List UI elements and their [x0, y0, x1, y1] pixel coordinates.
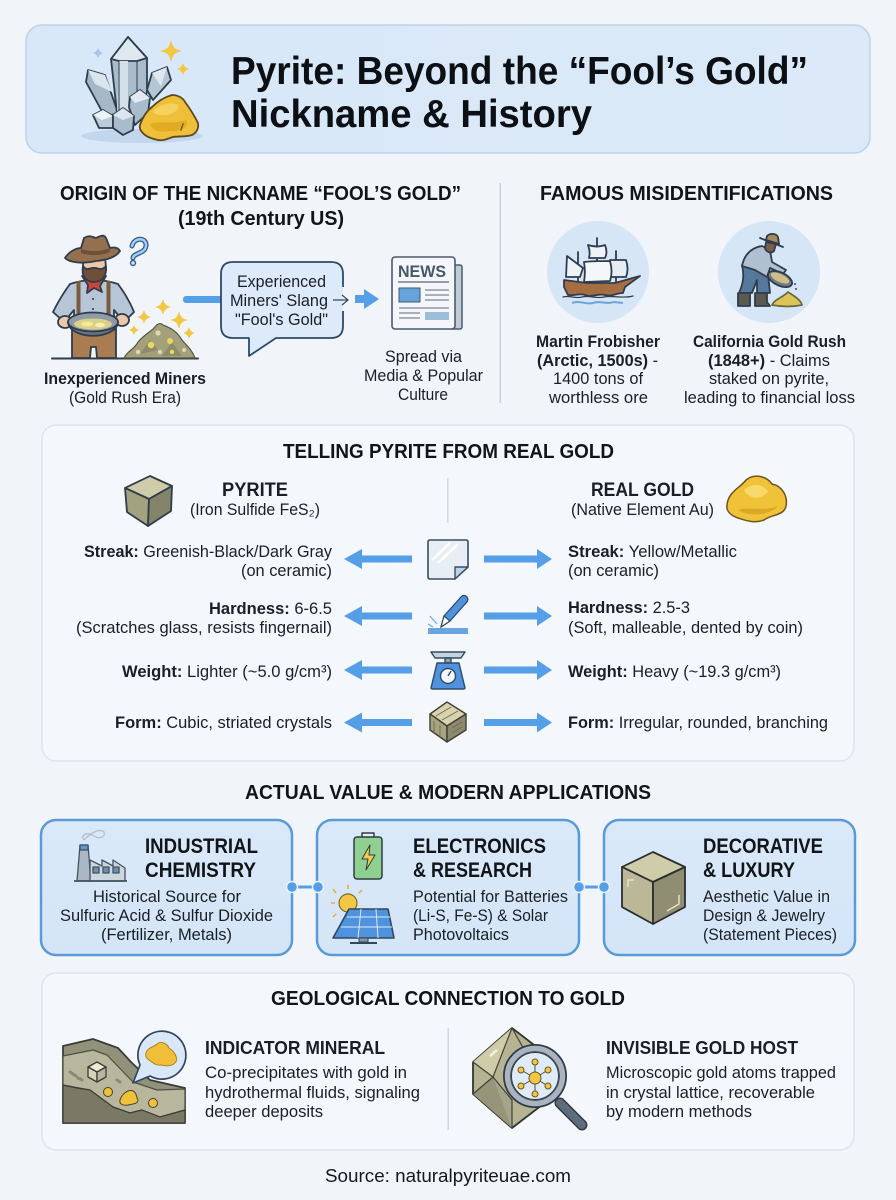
icon: gold nugget — [727, 476, 786, 522]
arrow: right — [484, 660, 552, 680]
text: indicator mineral: Co-precipitates with gold in — [205, 1064, 407, 1082]
row: hardness: Hardness: 6-6.5 — [209, 600, 332, 618]
row: streak — [84, 540, 737, 580]
label: spread via media: Media & Popular — [364, 367, 483, 385]
title: decorative and luxury — [703, 835, 823, 882]
text: invisible gold host — [606, 1038, 836, 1121]
connector: electronics to decorative — [574, 882, 610, 892]
icon: pyrite cube — [125, 476, 172, 526]
icon: battery — [354, 833, 382, 879]
label: inexperienced miners — [44, 370, 206, 407]
source line: Source: naturalpyriteuae.com — [325, 1166, 571, 1186]
text: california gold rush: (1848+) - Claims — [708, 352, 830, 370]
label: spread via media — [364, 348, 483, 404]
text: indicator mineral — [205, 1038, 420, 1121]
icon: pile of pyrite with sparkles — [124, 300, 195, 358]
icon: solar panel and sun — [331, 885, 394, 944]
connector: industrial to electronics — [286, 882, 324, 892]
text: decorative description: Aesthetic Value in — [703, 888, 830, 906]
icon: decorative cube — [622, 852, 685, 924]
heading: comparison: TELLING PYRITE FROM REAL GOLD — [283, 441, 614, 463]
real gold heading — [571, 480, 714, 519]
text: decorative description: (Statement Pieces) — [703, 926, 837, 944]
icon: miner with pan — [52, 236, 198, 358]
text: martin frobisher: 1400 tons of — [553, 370, 643, 388]
icon: factory — [74, 830, 127, 881]
row: form: Form: Irregular, rounded, branching — [568, 714, 828, 732]
header banner — [26, 25, 870, 153]
text: electronics description: Photovoltaics — [413, 926, 509, 944]
row: weight: Weight: Heavy (~19.3 g/cm³) — [568, 663, 781, 681]
row: streak: Streak: Greenish-Black/Dark Gray — [84, 543, 333, 561]
panel: geological connection to gold — [42, 973, 854, 1150]
card: electronics and research — [317, 820, 579, 955]
text: electronics description: (Li-S, Fe-S) & Solar — [413, 907, 548, 925]
row: hardness: Hardness: 2.5-3 — [568, 599, 690, 617]
speech bubble: slang: Miners' Slang — [230, 292, 328, 310]
text: invisible gold host: Microscopic gold atoms trapped — [606, 1064, 836, 1082]
heading: actual value and modern applications: ACTUAL VALUE & MODERN APPLICATIONS — [245, 782, 651, 804]
pyrite heading: (Iron Sulfide FeS₂) — [190, 501, 320, 519]
text: decorative description — [703, 888, 837, 944]
title: industrial chemistry: INDUSTRIAL — [145, 835, 258, 858]
text: martin frobisher: Martin Frobisher — [536, 333, 661, 351]
row: weight — [122, 652, 781, 689]
arrow: left — [344, 549, 412, 569]
title: Nickname & History — [231, 93, 593, 136]
text: indicator mineral: INDICATOR MINERAL — [205, 1038, 385, 1058]
text: decorative description: Design & Jewelry — [703, 907, 826, 925]
card: decorative and luxury — [604, 820, 855, 955]
icon: pyrite crystal with magnifier — [473, 1028, 582, 1128]
pyrite heading: PYRITE — [222, 480, 288, 501]
row: streak: (on ceramic) — [241, 562, 332, 580]
pyrite heading — [190, 480, 320, 519]
heading: origin — [60, 183, 461, 230]
icon: pyrite crystals and gold nugget — [81, 37, 203, 143]
panel: famous misidentifications — [536, 183, 855, 407]
text: california gold rush: California Gold Rush — [693, 333, 846, 351]
icon: striated cube — [430, 702, 466, 742]
label: inexperienced miners: (Gold Rush Era) — [69, 389, 181, 407]
text: martin frobisher: worthless ore — [548, 389, 648, 407]
label: inexperienced miners: Inexperienced Miners — [44, 370, 206, 388]
title: electronics and research: & RESEARCH — [413, 859, 532, 882]
title: industrial chemistry: CHEMISTRY — [145, 859, 256, 882]
text: industrial description: (Fertilizer, Metals) — [101, 926, 232, 944]
arrow: right — [484, 549, 552, 569]
text: electronics description: Potential for Batteries — [413, 888, 568, 906]
text: industrial description: Historical Source for — [93, 888, 241, 906]
arrow: to newspaper — [355, 289, 379, 309]
panel: telling pyrite from real gold — [42, 425, 854, 761]
text: invisible gold host: in crystal lattice, recoverable — [606, 1084, 815, 1102]
real gold heading: (Native Element Au) — [571, 501, 714, 519]
icon: question mark — [130, 239, 146, 266]
label: spread via media: Culture — [398, 386, 448, 404]
text: martin frobisher — [536, 333, 661, 407]
icon: ceramic streak plate — [428, 540, 468, 579]
icon: newspaper: NEWS — [398, 262, 446, 281]
icon: rock strata with callout — [63, 1031, 186, 1123]
row: streak: Streak: Yellow/Metallic — [568, 543, 737, 561]
heading: origin: ORIGIN OF THE NICKNAME “FOOL’S GOLD” — [60, 183, 461, 205]
panel: origin of the nickname — [44, 183, 483, 407]
row: form — [115, 702, 828, 742]
arrow: left — [344, 660, 412, 680]
label: spread via media: Spread via — [385, 348, 463, 366]
title: decorative and luxury: & LUXURY — [703, 859, 795, 882]
speech bubble: slang: "Fool's Gold" — [235, 311, 328, 329]
title: Pyrite: Beyond the “Fool’s Gold” — [231, 50, 808, 93]
text: industrial description: Sulfuric Acid & Sulfur Dioxide — [60, 907, 273, 925]
row: hardness: (Scratches glass, resists fingernail) — [76, 619, 332, 637]
arrow: left — [344, 606, 412, 626]
real gold heading: REAL GOLD — [591, 480, 694, 501]
row: weight: Weight: Lighter (~5.0 g/cm³) — [122, 663, 332, 681]
arrow: right — [484, 606, 552, 626]
title: electronics and research: ELECTRONICS — [413, 835, 546, 858]
card: industrial chemistry — [41, 820, 292, 955]
heading: misidentifications: FAMOUS MISIDENTIFICATIONS — [540, 183, 833, 205]
row: form: Form: Cubic, striated crystals — [115, 714, 332, 732]
text: indicator mineral: hydrothermal fluids, signaling — [205, 1084, 420, 1102]
speech bubble: slang: Experienced — [237, 273, 326, 291]
text: electronics description — [413, 888, 568, 944]
title — [231, 50, 808, 136]
text: industrial description — [60, 888, 273, 944]
arrow: left — [344, 712, 412, 732]
icon: gold panner in circle — [718, 221, 820, 323]
text: california gold rush: staked on pyrite, — [709, 370, 829, 388]
text: invisible gold host: INVISIBLE GOLD HOST — [606, 1038, 798, 1058]
title: industrial chemistry — [145, 835, 258, 882]
icon: newspaper — [392, 257, 462, 329]
text: california gold rush — [684, 333, 855, 407]
heading: origin: (19th Century US) — [178, 208, 344, 230]
row: hardness: (Soft, malleable, dented by coin) — [568, 619, 803, 637]
text: california gold rush: leading to financial loss — [684, 389, 855, 407]
icon: ship in circle — [547, 221, 649, 323]
heading: geological connection: GEOLOGICAL CONNECTION TO GOLD — [271, 988, 625, 1010]
icon: scratching pen — [428, 596, 468, 634]
arrow: to speech bubble — [183, 296, 223, 303]
title: decorative and luxury: DECORATIVE — [703, 835, 823, 858]
arrow: right — [484, 712, 552, 732]
text: invisible gold host: by modern methods — [606, 1103, 752, 1121]
speech bubble: slang — [221, 262, 348, 356]
icon: scale — [431, 652, 465, 689]
text: martin frobisher: (Arctic, 1500s) - — [537, 352, 658, 370]
row: hardness — [76, 596, 803, 637]
row: streak: (on ceramic) — [568, 562, 659, 580]
text: indicator mineral: deeper deposits — [205, 1103, 323, 1121]
title: electronics and research — [413, 835, 546, 882]
